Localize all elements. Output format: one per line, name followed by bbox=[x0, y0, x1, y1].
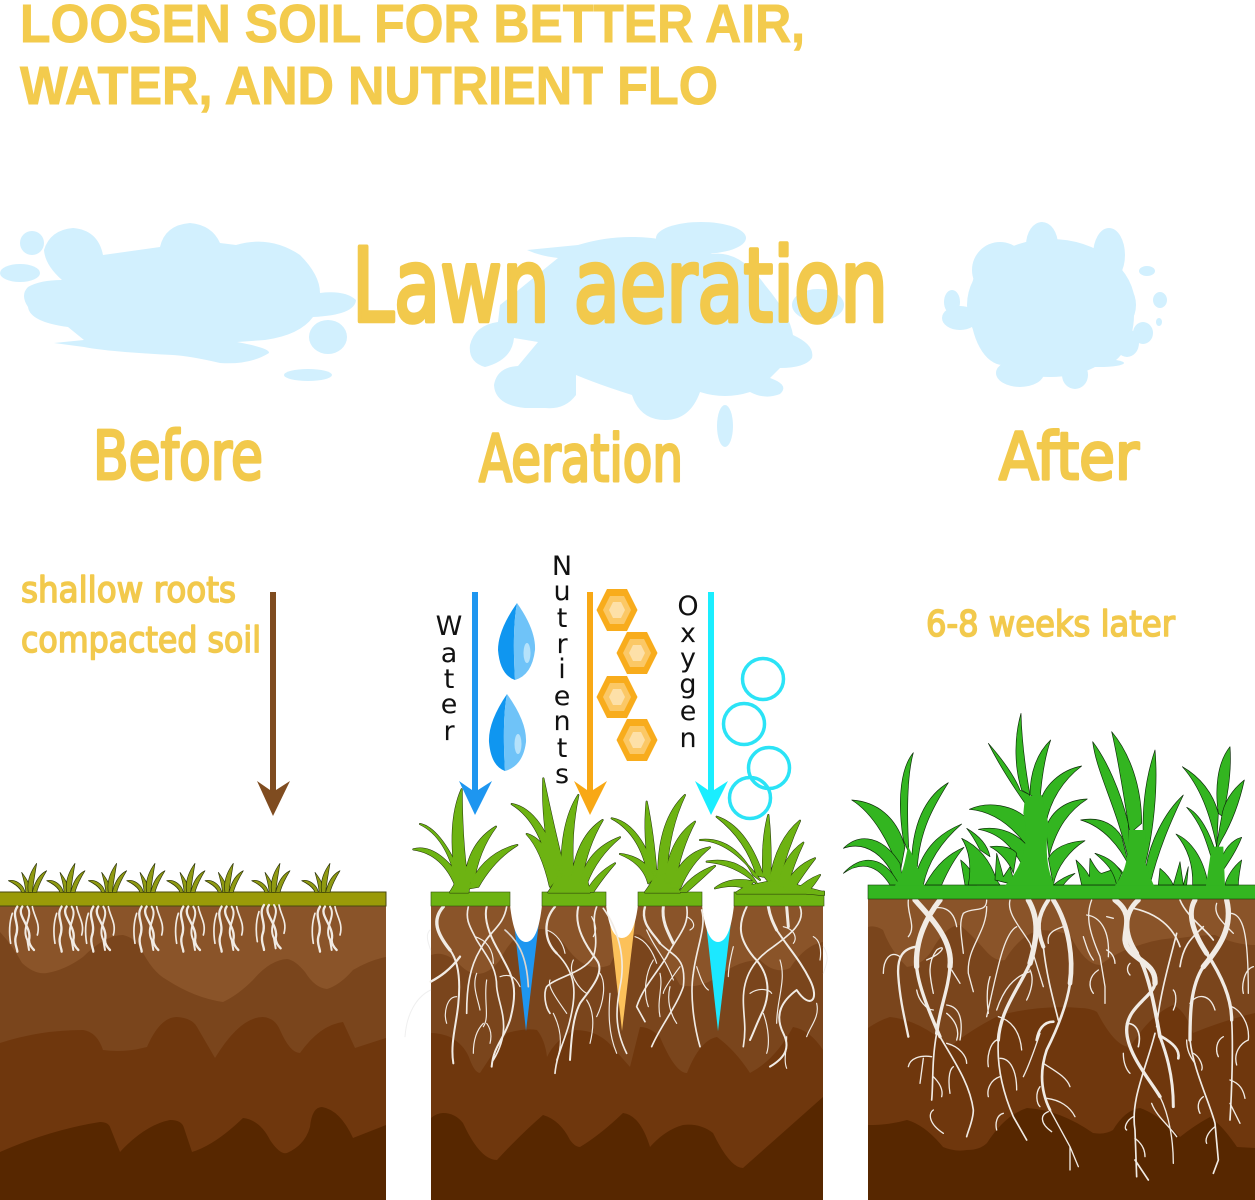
column heading: after: After bbox=[999, 420, 1139, 495]
label: oxygen: O bbox=[677, 591, 699, 622]
panel: after soil bbox=[843, 713, 1255, 1200]
small tuft bbox=[961, 828, 1015, 885]
cloud: left bbox=[0, 223, 356, 381]
label: oxygen: e bbox=[680, 696, 696, 727]
note: 6-8 weeks later: 6-8 weeks later bbox=[926, 604, 1175, 645]
label: nutrients: e bbox=[554, 681, 570, 712]
clouds background bbox=[0, 222, 1167, 447]
note: shallow roots compacted soil: compacted soil bbox=[21, 620, 261, 661]
icon: nutrient hexagons bbox=[596, 589, 658, 761]
tuft 1 bbox=[843, 753, 964, 886]
label: nutrients: N bbox=[552, 551, 572, 582]
water wedge bbox=[512, 905, 541, 1031]
label: nutrients: t bbox=[557, 733, 567, 764]
grass strip: after bbox=[868, 885, 1255, 899]
label: nutrients: t bbox=[557, 603, 567, 634]
label: water: r bbox=[443, 716, 455, 747]
shallow grass tufts and roots bbox=[8, 863, 341, 952]
icon: water drops bbox=[489, 603, 535, 771]
cloud drip bbox=[717, 405, 733, 447]
title: Lawn aeration bbox=[352, 227, 888, 346]
label: water: W bbox=[436, 611, 462, 642]
panel: aeration soil bbox=[405, 778, 827, 1200]
arrow: compaction bbox=[257, 592, 290, 816]
label: nutrients: i bbox=[558, 654, 566, 685]
tuft 4 bbox=[1176, 747, 1244, 886]
tuft 3 bbox=[1081, 732, 1183, 886]
label: nutrients: u bbox=[553, 576, 571, 607]
column heading: aeration: Aeration bbox=[479, 422, 683, 497]
icon: oxygen bubbles bbox=[724, 658, 790, 818]
cloud: right bbox=[942, 222, 1167, 389]
label: water: a bbox=[441, 638, 457, 669]
roots: aeration bbox=[405, 907, 827, 1073]
arrow: nutrients bbox=[574, 592, 607, 815]
label: water: e bbox=[441, 689, 457, 720]
column heading: before: Before bbox=[93, 417, 263, 495]
tuft 2 bbox=[969, 713, 1087, 886]
cloud: middle bbox=[470, 222, 844, 420]
oxygen wedge bbox=[704, 905, 733, 1031]
heading: WATER, AND NUTRIENT FLO bbox=[20, 56, 718, 116]
grass strip segments: aeration bbox=[431, 892, 824, 906]
arrow: oxygen bbox=[695, 592, 728, 815]
label: nutrients: s bbox=[555, 759, 569, 790]
grass strip: before bbox=[0, 892, 386, 906]
label: oxygen: g bbox=[679, 669, 697, 700]
grass tufts: after bbox=[843, 713, 1244, 886]
label: oxygen: n bbox=[679, 723, 697, 754]
small tuft right bbox=[1158, 862, 1188, 885]
arrow: water bbox=[459, 592, 492, 815]
label: nutrients: n bbox=[553, 706, 571, 737]
nutrient wedge bbox=[608, 905, 637, 1031]
aeration holes bbox=[510, 892, 734, 942]
label: nutrients: r bbox=[556, 629, 568, 660]
label: oxygen: y bbox=[680, 643, 696, 674]
label: oxygen: x bbox=[680, 618, 696, 649]
label: water: t bbox=[444, 664, 454, 695]
note: shallow roots compacted soil: shallow roots bbox=[21, 570, 236, 611]
small tuft center bbox=[1076, 853, 1123, 885]
roots: after bbox=[883, 900, 1253, 1180]
grass tufts: aeration bbox=[413, 778, 824, 895]
panel: before soil bbox=[0, 863, 386, 1200]
